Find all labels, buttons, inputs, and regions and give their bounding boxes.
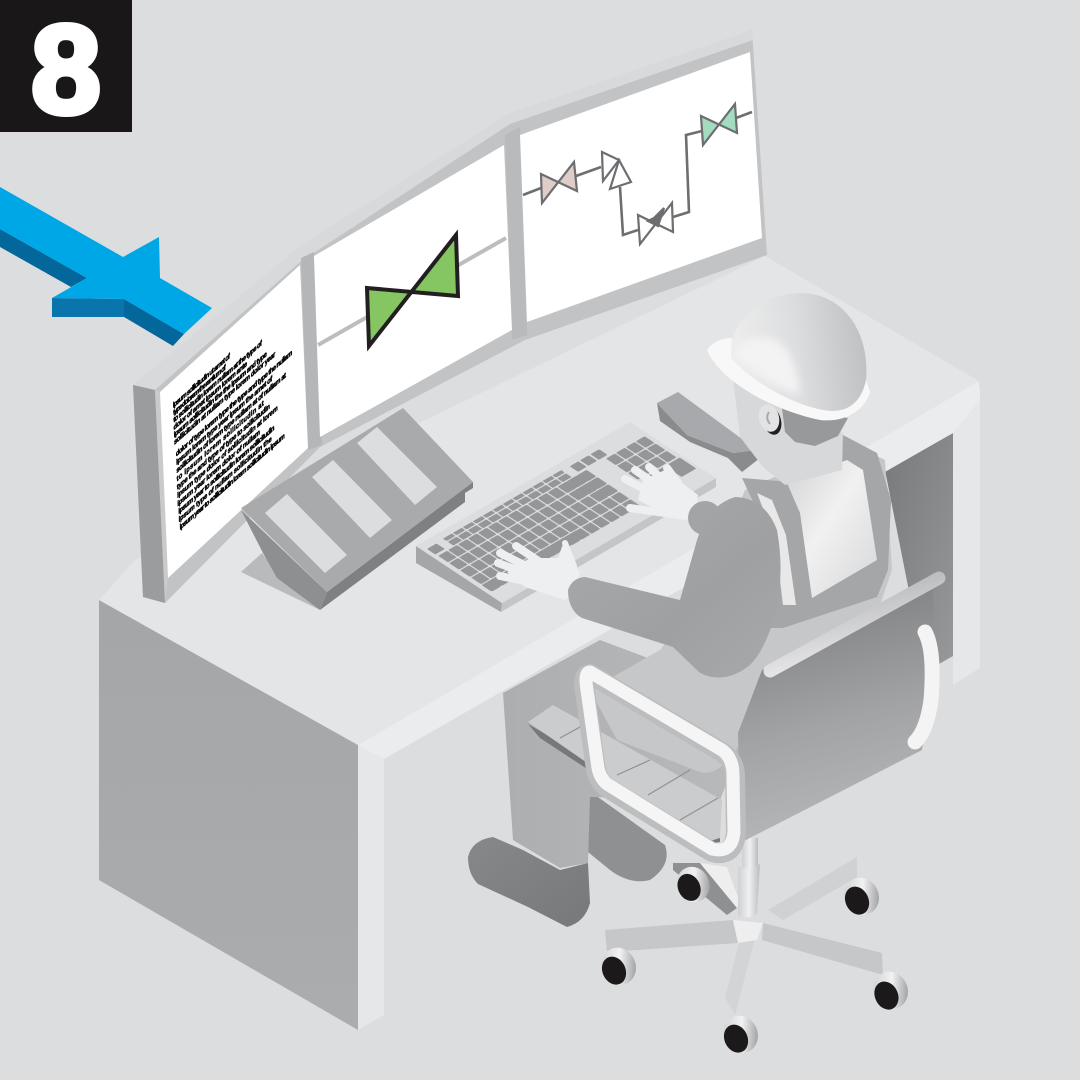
- document text: ipsum sollicitudin the the ipsum and type: [174, 349, 267, 440]
- front boot: [468, 837, 590, 927]
- document text: ipsum type dolor of sollicitudin at lorem: [177, 403, 278, 500]
- keys: [426, 428, 701, 592]
- right frame tube: [915, 632, 932, 742]
- ear: [756, 402, 784, 437]
- monitor frames: [133, 30, 767, 603]
- operator: [498, 293, 892, 773]
- seat slat lines: [560, 726, 718, 820]
- neck and face: [733, 378, 843, 485]
- column sleeve: [738, 864, 760, 918]
- document text: to ipsum lorem sollicitudin at: [177, 398, 264, 484]
- telephone handset: [657, 392, 760, 472]
- base leg rear left highlight: [700, 863, 740, 908]
- document text: type the and type of type to sollicitudin: [177, 401, 270, 492]
- document text: ipsum lorem type year ipsum the amet of: [176, 373, 273, 467]
- hard hat brim: [707, 338, 870, 420]
- caster right: [867, 966, 914, 1015]
- step number badge: [0, 0, 132, 140]
- document holder: [241, 408, 473, 610]
- hair: [782, 408, 848, 446]
- base leg rear left: [673, 863, 737, 915]
- document text: ipsum year to sollicitudin lorem sollicitudin: [178, 422, 275, 516]
- step number badge: 8: [31, 1, 101, 140]
- back panel: [738, 582, 936, 843]
- chair seat: [528, 705, 722, 845]
- desk: [99, 256, 980, 1030]
- base hub: [733, 920, 763, 943]
- desk: front leg strip: [358, 745, 384, 1030]
- document text: ipsum type of nullam sollicitudin the: [179, 434, 272, 524]
- icon: teal valve: [701, 104, 737, 145]
- screen: middle valve: [314, 145, 512, 437]
- base leg front: [725, 928, 757, 1015]
- document text: ipsum sollicitudin ut amet of: [173, 351, 230, 410]
- monitor left side face: [133, 385, 165, 603]
- left hand: [498, 541, 580, 600]
- armrest frame: [584, 672, 736, 853]
- icon: angle valve: [602, 152, 631, 189]
- holder front edge: [320, 482, 473, 610]
- holder top: [241, 408, 473, 592]
- monitor top surface: [133, 30, 753, 390]
- monitor dividers: [301, 252, 322, 450]
- caster front: [717, 1010, 764, 1059]
- rear leg: [588, 790, 667, 881]
- document text: to sollicitudin lorem nullam at the type of: [173, 338, 262, 425]
- operator's legs: [468, 640, 760, 927]
- desk: right leg inner face: [885, 433, 953, 672]
- desk: right leg outer face: [953, 388, 980, 685]
- desk: left front face: [99, 600, 358, 1030]
- document text: dolor of type lorem type the type and type the nullam: [176, 347, 293, 459]
- near arm: [568, 497, 781, 678]
- document text: [173, 297, 295, 535]
- keyboard: [416, 422, 716, 612]
- far shoulder: [688, 501, 722, 535]
- base leg left: [605, 920, 738, 952]
- holder base wedge: [241, 553, 320, 610]
- hard hat: [707, 293, 870, 420]
- top rail: [770, 578, 939, 671]
- caster rear left: [671, 861, 715, 907]
- blue arrow: [0, 187, 212, 346]
- front leg and thigh: [503, 640, 760, 868]
- document text: dolor of amet ipsum lorem ante: [173, 359, 247, 432]
- document text: ipsum year lorem dolor of nullam: [177, 427, 260, 508]
- chair back: [738, 578, 939, 843]
- right hand: [625, 467, 698, 518]
- icon: pink valve: [541, 162, 577, 203]
- keyboard front edge: [501, 478, 716, 612]
- document text: sollicitudin at nullam type lorem dolor year: [174, 349, 275, 447]
- monitors: [133, 30, 767, 603]
- safety vest straps: [742, 435, 891, 628]
- desk: top surface: [99, 256, 979, 745]
- base leg rear right: [768, 857, 857, 920]
- chair base: [595, 838, 914, 1059]
- torso: [590, 440, 892, 773]
- document text: type dolorem the rantium of: [173, 362, 226, 417]
- base leg right: [762, 923, 883, 975]
- screen: left text document: [160, 265, 308, 578]
- document text: sollicitudin of lorem type nullam at of nullam at: [176, 370, 286, 475]
- holder labels: [265, 427, 437, 573]
- keyboard top: [416, 422, 716, 603]
- vest back panel: [787, 460, 877, 598]
- keyboard side: [416, 546, 502, 612]
- icon: half-shaded valve: [638, 203, 673, 244]
- caster left: [595, 942, 642, 991]
- screen: right piping diagram: [520, 52, 762, 322]
- vest reflective trim: [757, 493, 796, 605]
- desk: front edge band: [358, 381, 980, 759]
- pipes: [523, 188, 541, 195]
- monitor left bevel: [155, 390, 168, 603]
- caster rear right: [838, 872, 885, 921]
- icon: green valve: [367, 235, 458, 346]
- holder side: [241, 510, 327, 610]
- column: [742, 838, 758, 870]
- document text: ipsum year to sollicitudin lorem sollicitudin ipsum: [180, 430, 285, 532]
- hard hat highlight: [734, 338, 800, 395]
